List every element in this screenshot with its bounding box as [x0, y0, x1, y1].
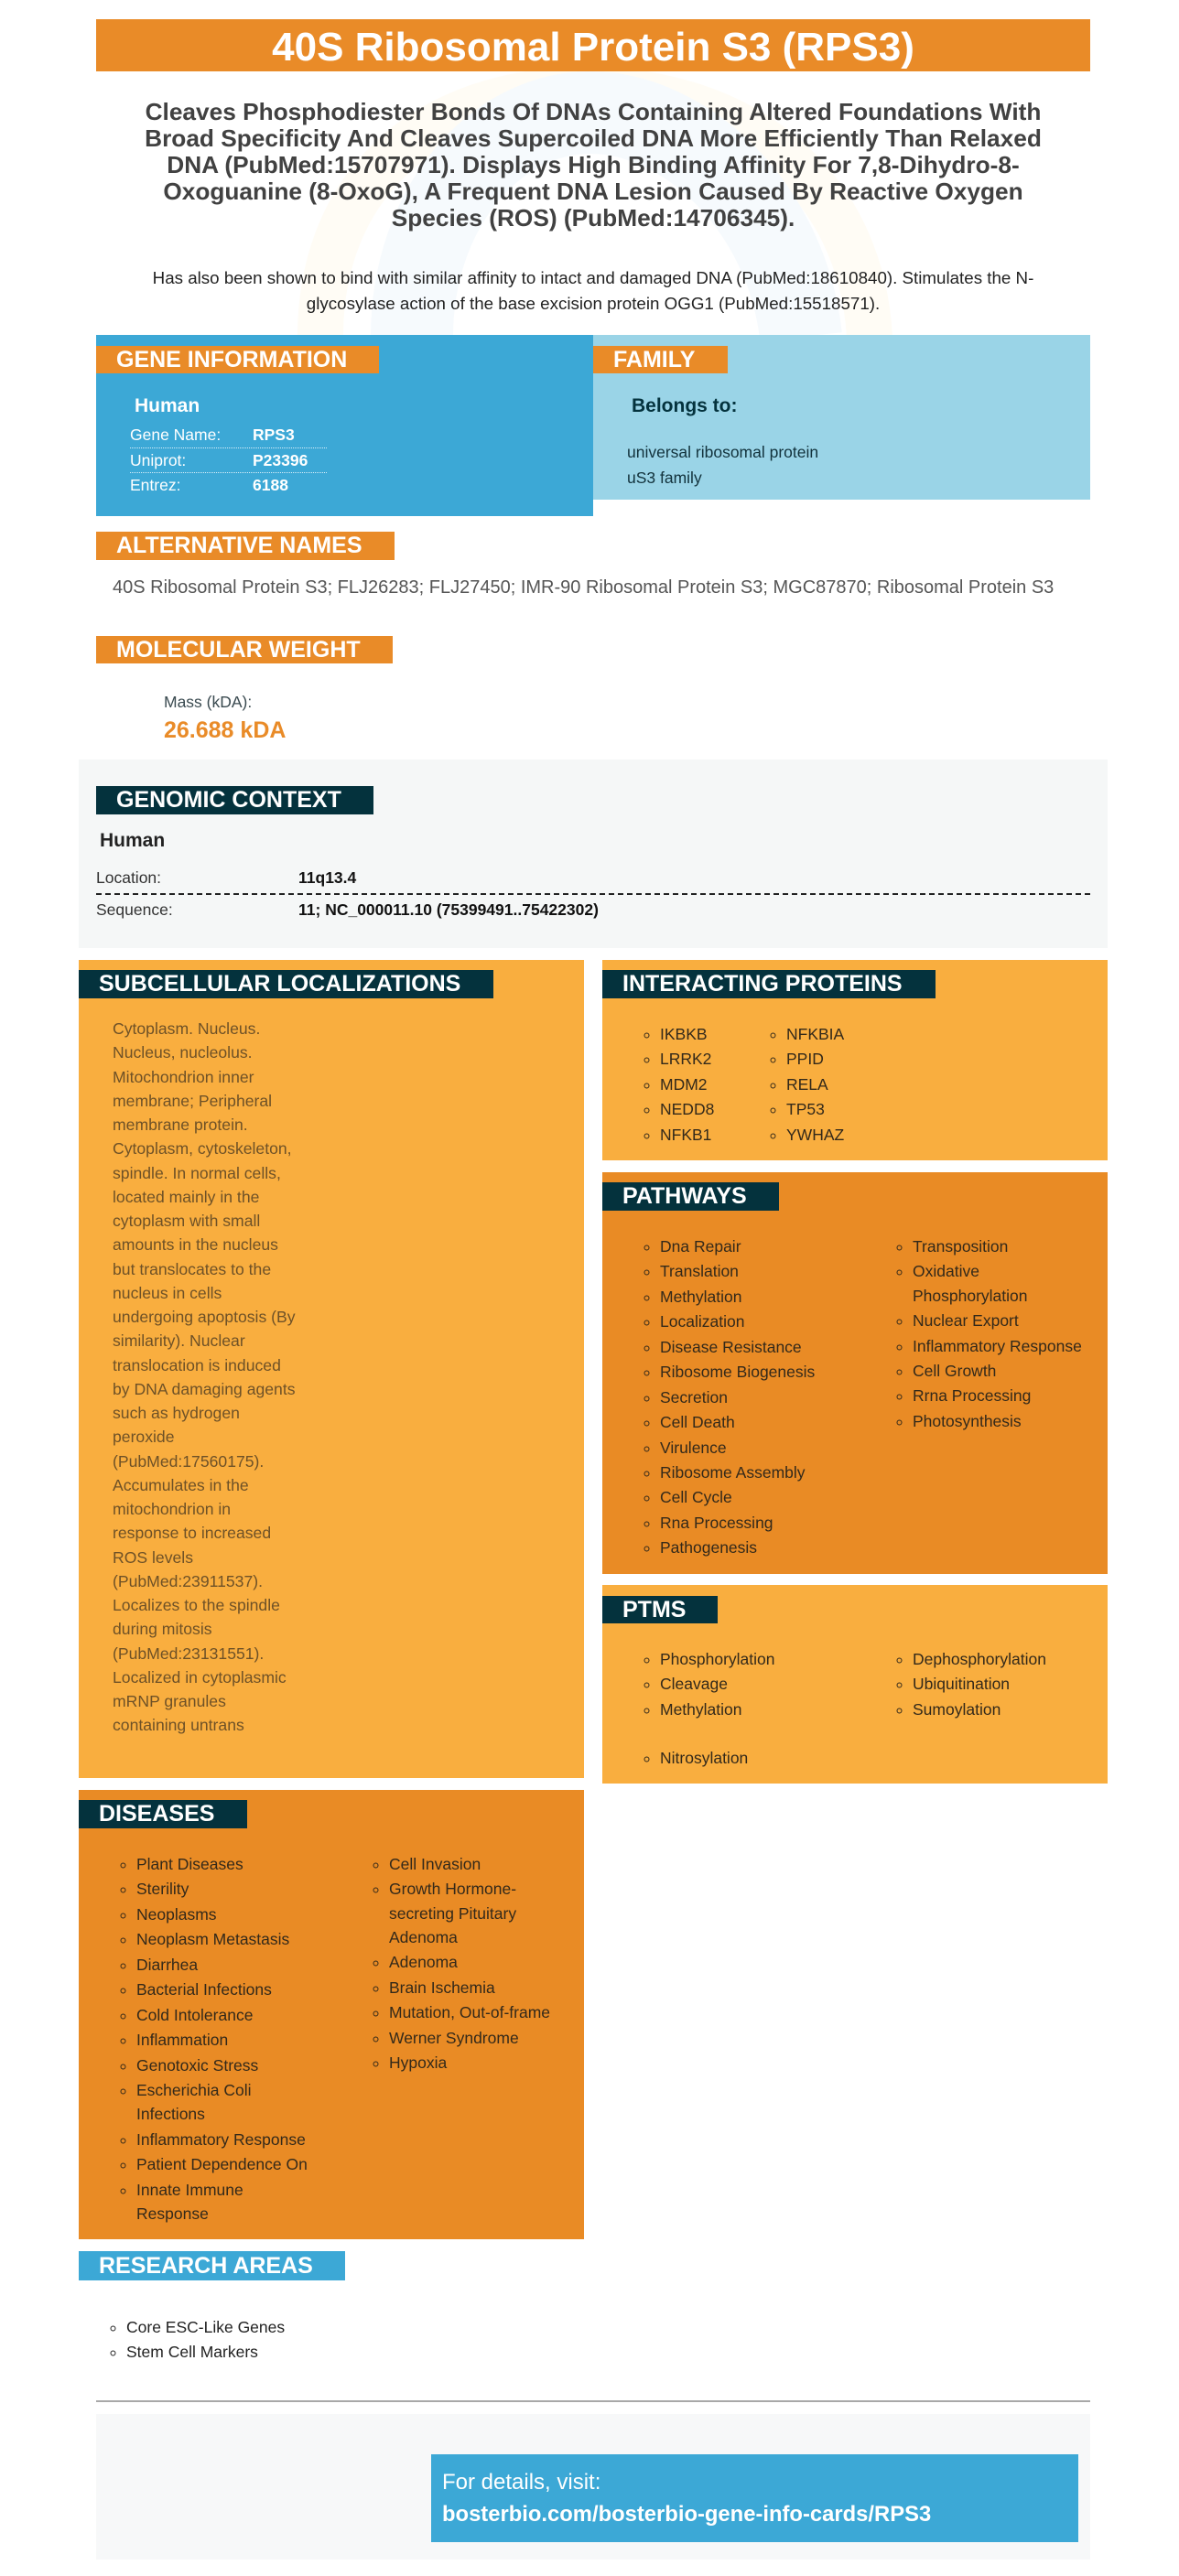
subtitle summary: Oxoguanine (8-OxoG), A Frequent DNA Lesion Caused By Reactive Oxygen	[163, 178, 1023, 205]
localization text: during mitosis	[113, 1620, 212, 1638]
subtitle summary: Species (ROS) (PubMed:14706345).	[392, 204, 795, 232]
panel: genomic context	[79, 760, 1108, 948]
species label: Human	[100, 830, 165, 851]
gene fields: P23396	[253, 451, 308, 469]
localization text: Localized in cytoplasmic	[113, 1668, 287, 1687]
localization text: cytoplasm with small	[113, 1212, 260, 1230]
disease list column 2: Brain Ischemia	[389, 1978, 495, 1997]
disease list column 2: Werner Syndrome	[389, 2029, 519, 2047]
callout label: For details, visit:	[442, 2470, 600, 2495]
disease list column 2: secreting Pituitary	[389, 1904, 516, 1923]
mass value: 26.688 kDA	[164, 717, 286, 743]
disease list column 1: Sterility	[136, 1880, 189, 1898]
disease list column 1: Escherichia Coli	[136, 2081, 251, 2099]
heading: diseases: DISEASES	[99, 1801, 214, 1827]
heading: PTMs	[602, 1596, 718, 1623]
heading: genomic context: GENOMIC CONTEXT	[116, 787, 341, 813]
disease list column 2: Adenoma	[389, 1928, 458, 1946]
pathway list column 1: Translation	[660, 1262, 739, 1280]
pathway list column 1: Pathogenesis	[660, 1538, 757, 1557]
pathway list column 1	[644, 1237, 815, 1557]
gene fields	[130, 426, 327, 494]
protein list column 2: RELA	[786, 1075, 828, 1094]
disease list column 1: Infections	[136, 2105, 205, 2123]
disease list column 2: Mutation, Out-of-frame	[389, 2003, 550, 2021]
subtitle summary: DNA (PubMed:15707971). Displays High Binding Affinity For 7,8-Dihydro-8-	[167, 151, 1020, 178]
pathway list column 1: Cell Cycle	[660, 1488, 732, 1506]
location row: 11q13.4	[298, 868, 356, 887]
subtitle summary: Cleaves Phosphodiester Bonds Of DNAs Containing Altered Foundations With	[146, 97, 1041, 124]
pathway list column 1: Virulence	[660, 1439, 727, 1457]
family names: universal ribosomal protein	[627, 443, 818, 461]
heading: PTMs: PTMS	[622, 1597, 686, 1622]
heading: diseases	[79, 1800, 247, 1828]
research areas list: Stem Cell Markers	[126, 2343, 258, 2361]
localization text: similarity). Nuclear	[113, 1331, 245, 1350]
protein list column 1: LRRK2	[660, 1050, 711, 1068]
protein list column 2: YWHAZ	[786, 1126, 844, 1144]
dashed divider	[96, 893, 1090, 895]
disease list column 1: Cold Intolerance	[136, 2006, 253, 2024]
research areas list: Core ESC-Like Genes	[126, 2318, 285, 2336]
panel: subcellular localizations	[79, 960, 584, 1778]
gene fields: Entrez:	[130, 476, 180, 494]
pathway list column 2: Inflammatory Response	[913, 1337, 1082, 1355]
disease list column 1	[121, 1855, 308, 2223]
disease list column 1: Neoplasms	[136, 1905, 217, 1924]
panel: gene information	[96, 335, 593, 516]
localization text: spindle. In normal cells,	[113, 1164, 281, 1182]
description paragraph	[153, 268, 1033, 313]
disease list column 2: Cell Invasion	[389, 1855, 481, 1873]
pathway list column 2: Rrna Processing	[913, 1386, 1031, 1405]
disease list column 1: Inflammatory Response	[136, 2130, 306, 2149]
pathway list column 1: Ribosome Assembly	[660, 1463, 806, 1482]
protein list column 2: TP53	[786, 1100, 825, 1118]
heading: pathways: PATHWAYS	[622, 1183, 747, 1209]
localization text: located mainly in the	[113, 1188, 259, 1206]
sequence row: 11; NC_000011.10 (75399491..75422302)	[298, 900, 599, 919]
protein list column 2: PPID	[786, 1050, 824, 1068]
subtitle summary	[145, 97, 1042, 232]
heading: family	[593, 346, 728, 373]
sequence row	[96, 900, 599, 919]
protein list column 2	[771, 1025, 844, 1144]
title	[96, 19, 1090, 71]
disease list column 1: Genotoxic Stress	[136, 2055, 258, 2074]
heading: subcellular localizations: SUBCELLULAR LOCALIZATIONS	[99, 971, 460, 997]
background watermark logo	[297, 71, 892, 335]
localization text: translocation is induced	[113, 1356, 281, 1374]
localization text: by DNA damaging agents	[113, 1380, 296, 1398]
pathway list column 1: Ribosome Biogenesis	[660, 1363, 815, 1381]
protein list column 1: MDM2	[660, 1075, 708, 1094]
protein list column 1: NEDD8	[660, 1100, 714, 1118]
pathway list column 1: Localization	[660, 1312, 744, 1331]
panel: pathways	[602, 1172, 1108, 1574]
disease list column 2: Growth Hormone-	[389, 1880, 516, 1898]
localization text: membrane; Peripheral	[113, 1092, 272, 1110]
callout: details link	[431, 2454, 1078, 2542]
localization text: Accumulates in the	[113, 1476, 249, 1494]
callout url: bosterbio.com/bosterbio-gene-info-cards/RPS3	[442, 2502, 931, 2527]
family names	[627, 443, 818, 487]
location row: Location:	[96, 868, 161, 887]
pathway list column 2: Nuclear Export	[913, 1311, 1019, 1330]
disease list column 1: Innate Immune	[136, 2180, 243, 2198]
localization text: Nucleus, nucleolus.	[113, 1043, 253, 1062]
PTM list column 1	[644, 1650, 774, 1719]
localization text: response to increased	[113, 1524, 271, 1542]
disease list column 1: Neoplasm Metastasis	[136, 1930, 289, 1948]
pathway list column 1: Rna Processing	[660, 1514, 773, 1532]
disease list column 1: Response	[136, 2204, 209, 2223]
localization text: (PubMed:17560175).	[113, 1451, 264, 1470]
localization text: amounts in the nucleus	[113, 1235, 278, 1254]
localization text: undergoing apoptosis (By	[113, 1308, 296, 1326]
pathway list column 1: Disease Resistance	[660, 1338, 802, 1356]
species label: Human	[135, 395, 200, 416]
pathway list column 2: Phosphorylation	[913, 1287, 1027, 1305]
gene fields: Gene Name:	[130, 426, 221, 444]
pathway list column 1: Dna Repair	[660, 1237, 741, 1256]
pathway list column 1: Secretion	[660, 1388, 728, 1407]
localization text: Cytoplasm, cytoskeleton,	[113, 1139, 292, 1158]
PTM list last item: Nitrosylation	[660, 1749, 748, 1767]
panel: PTMs	[602, 1585, 1108, 1784]
pathway list column 2: Photosynthesis	[913, 1412, 1022, 1430]
panel: diseases	[79, 1790, 584, 2239]
PTM list column 2: Sumoylation	[913, 1700, 1001, 1719]
localization text: Cytoplasm. Nucleus.	[113, 1019, 260, 1038]
PTM list column 2: Dephosphorylation	[913, 1650, 1046, 1668]
heading: alternative names: ALTERNATIVE NAMES	[116, 533, 362, 558]
localization text: but translocates to the	[113, 1259, 271, 1277]
alternative names text: 40S Ribosomal Protein S3; FLJ26283; FLJ27450; IMR-90 Ribosomal Protein S3; MGC87870; Ribosomal Protein S3	[113, 577, 1054, 598]
location row	[96, 868, 357, 887]
pathway list column 2: Transposition	[913, 1237, 1008, 1256]
heading: molecular weight: MOLECULAR WEIGHT	[116, 637, 361, 663]
sequence row: Sequence:	[96, 900, 173, 919]
pathway list column 1: Methylation	[660, 1288, 741, 1306]
heading: research areas: RESEARCH AREAS	[99, 2253, 313, 2279]
description paragraph: glycosylase action of the base excision protein OGG1 (PubMed:15518571).	[307, 294, 880, 313]
localization text: Localizes to the spindle	[113, 1596, 280, 1614]
localization text: (PubMed:23911537).	[113, 1572, 263, 1590]
pathway list column 1: Cell Death	[660, 1413, 735, 1431]
localization text: mitochondrion in	[113, 1500, 231, 1518]
localization text: peroxide	[113, 1428, 174, 1446]
disease list column 1: Diarrhea	[136, 1956, 198, 1974]
gene fields: Uniprot:	[130, 451, 186, 469]
family names: uS3 family	[627, 469, 702, 487]
belongs to label: Belongs to:	[632, 395, 738, 416]
title: 40S Ribosomal Protein S3 (RPS3)	[272, 25, 914, 70]
disease list column 1: Inflammation	[136, 2031, 228, 2049]
protein list column 1	[644, 1025, 714, 1144]
localization text	[113, 1019, 296, 1734]
localization text: mRNP granules	[113, 1692, 226, 1710]
disease list column 2	[373, 1855, 550, 2072]
description paragraph: Has also been shown to bind with similar affinity to intact and damaged DNA (PubMed:18610840). Stimulates the N-	[153, 268, 1033, 287]
pathway list column 2: Cell Growth	[913, 1362, 996, 1380]
heading: interacting proteins: INTERACTING PROTEINS	[622, 971, 903, 997]
disease list column 1: Plant Diseases	[136, 1855, 243, 1873]
panel: family	[593, 335, 1090, 500]
PTM list column 1: Methylation	[660, 1700, 741, 1719]
mass label: Mass (kDA):	[164, 693, 252, 711]
heading: gene information: GENE INFORMATION	[116, 347, 347, 372]
disease list column 1: Bacterial Infections	[136, 1980, 272, 1999]
gene fields: RPS3	[253, 426, 295, 444]
panel: footer	[96, 2414, 1090, 2560]
localization text: membrane protein.	[113, 1116, 248, 1134]
pathway list column 2	[897, 1237, 1082, 1430]
disease list column 2: Adenoma	[389, 1953, 458, 1971]
protein list column 1: IKBKB	[660, 1025, 708, 1043]
subtitle summary: Broad Specificity And Cleaves Supercoiled DNA More Efficiently Than Relaxed	[145, 124, 1042, 152]
heading: pathways	[602, 1182, 779, 1211]
localization text: containing untrans	[113, 1716, 244, 1734]
localization text: ROS levels	[113, 1548, 193, 1567]
heading: family: FAMILY	[613, 347, 695, 372]
research areas list	[110, 2318, 285, 2361]
protein list column 2: NFKBIA	[786, 1025, 844, 1043]
disease list column 2: Hypoxia	[389, 2053, 447, 2072]
PTM list column 2: Ubiquitination	[913, 1675, 1010, 1693]
localization text: (PubMed:23131551).	[113, 1644, 264, 1662]
localization text: nucleus in cells	[113, 1284, 222, 1302]
protein list column 1: NFKB1	[660, 1126, 711, 1144]
PTM list column 1: Cleavage	[660, 1675, 728, 1693]
panel: interacting proteins	[602, 960, 1108, 1160]
disease list column 1: Patient Dependence On	[136, 2155, 308, 2173]
pathway list column 2: Oxidative	[913, 1262, 979, 1280]
localization text: such as hydrogen	[113, 1404, 240, 1422]
PTM list column 1: Phosphorylation	[660, 1650, 774, 1668]
gene fields: 6188	[253, 476, 288, 494]
PTM list column 2	[897, 1650, 1046, 1719]
localization text: Mitochondrion inner	[113, 1067, 254, 1085]
